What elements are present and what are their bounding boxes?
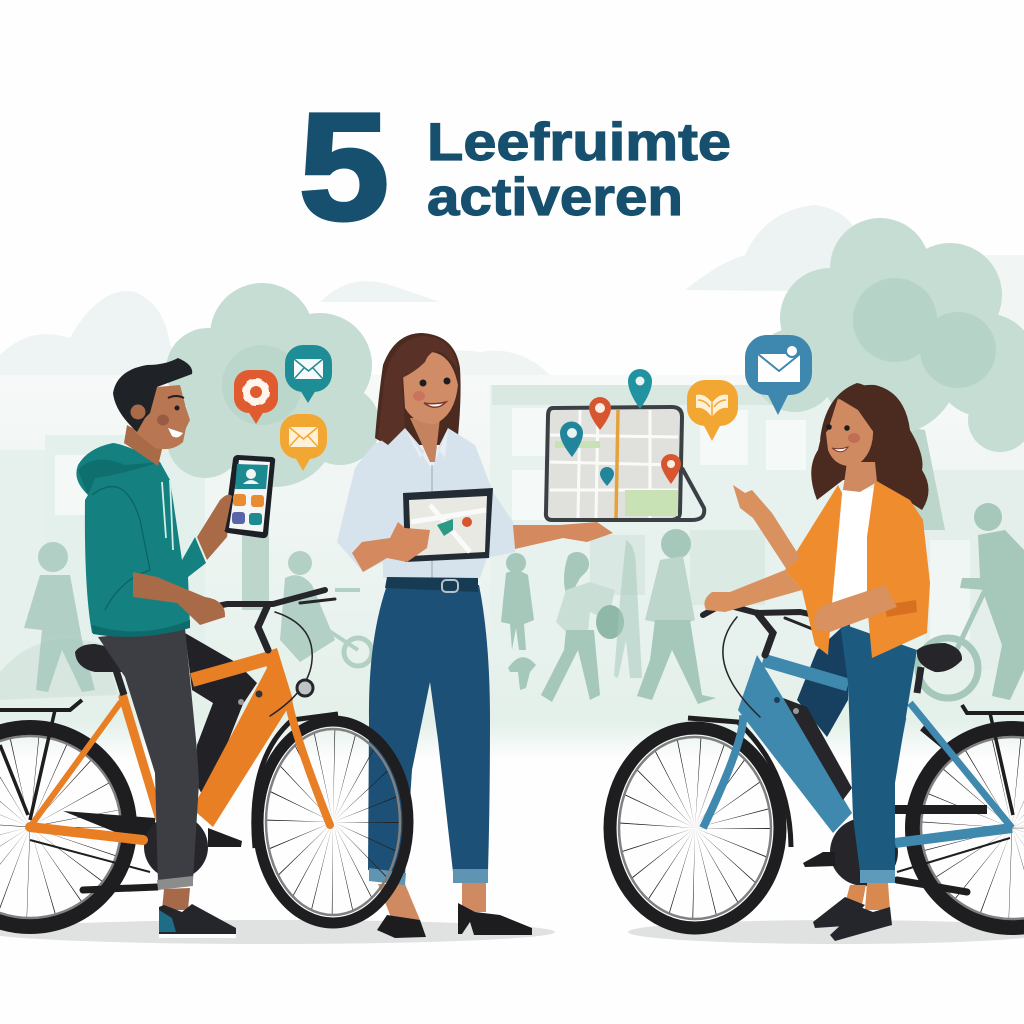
rear wheel <box>0 728 129 926</box>
blue bike (right) <box>610 604 1024 928</box>
icon: settings bubble <box>234 370 278 424</box>
near leg <box>98 628 199 884</box>
left speech bubble icons <box>234 345 332 471</box>
front wheel <box>610 718 791 928</box>
rear wheel <box>913 729 1024 927</box>
orange bike (left) <box>0 590 408 926</box>
shoe <box>159 904 236 938</box>
title text: Leefruimte <box>427 113 731 172</box>
lower arm and hand <box>133 572 225 625</box>
icon: teal mail bubble <box>285 345 332 403</box>
man with phone <box>76 358 275 938</box>
rack and drivetrain <box>0 700 157 890</box>
title text <box>427 113 731 227</box>
lower arm left and hand <box>704 570 802 612</box>
map pin small green <box>600 467 614 486</box>
head <box>403 352 458 424</box>
near leg <box>840 623 917 872</box>
woman on the right <box>704 383 930 941</box>
map pin blue <box>560 422 583 457</box>
cockpit <box>703 604 847 717</box>
title <box>299 82 731 252</box>
icon: yellow mail bubble <box>280 414 327 471</box>
faded distant person <box>614 540 642 678</box>
rack and drivetrain <box>897 705 1024 892</box>
dog <box>508 657 536 690</box>
left forearm and hand <box>352 522 430 572</box>
hair back <box>811 385 928 510</box>
belt <box>385 577 478 592</box>
hoodie <box>76 443 206 636</box>
man with long coat <box>637 529 716 704</box>
neck <box>843 462 877 492</box>
frame <box>703 660 1012 843</box>
cockpit <box>188 590 335 716</box>
person behind man <box>280 551 372 666</box>
standing person <box>501 553 534 650</box>
map pin teal above <box>628 369 652 409</box>
raised forearm and hand <box>733 485 800 570</box>
background tree right <box>753 218 1024 530</box>
white shirt <box>832 488 875 615</box>
forearm to phone <box>197 500 230 560</box>
frame <box>30 658 330 840</box>
background: faded city park scene <box>0 205 1024 760</box>
person walking far left <box>24 542 95 692</box>
front wheel <box>254 714 408 923</box>
icon: yellow book bubble <box>687 380 738 441</box>
cyclist far right <box>918 503 1024 700</box>
ankles <box>846 883 890 910</box>
person with bag <box>541 552 624 702</box>
hand on phone <box>218 495 232 534</box>
orange cardigan <box>785 485 842 655</box>
title text: activeren <box>427 168 683 227</box>
woman right far leg <box>797 620 850 737</box>
background crowd silhouettes <box>24 503 1024 704</box>
saddle <box>917 643 962 672</box>
woman in the centre with tablet <box>337 333 613 938</box>
saddle <box>75 644 125 672</box>
head <box>825 395 873 466</box>
ground shadows <box>0 920 1024 944</box>
right arm with open hand <box>513 522 613 549</box>
blouse <box>337 428 515 578</box>
floating map panel <box>546 369 704 520</box>
title number: 5 <box>299 82 389 252</box>
man far leg <box>185 633 257 800</box>
lower arm right and hand <box>814 585 897 632</box>
shoes <box>813 897 865 928</box>
trousers <box>368 585 490 875</box>
phone <box>224 455 275 538</box>
neck <box>410 418 440 462</box>
ankles <box>378 880 486 920</box>
tablet <box>403 488 493 562</box>
neck <box>124 425 163 466</box>
head <box>135 385 190 449</box>
far shoe <box>208 828 242 847</box>
background tree left <box>166 283 380 610</box>
far foot <box>803 852 835 867</box>
ankle <box>162 888 190 910</box>
map pin red right <box>661 454 681 484</box>
hair back <box>375 333 461 445</box>
icon: blue mail bubble <box>745 335 812 415</box>
shoes <box>377 915 426 938</box>
map pin red top <box>589 397 611 430</box>
